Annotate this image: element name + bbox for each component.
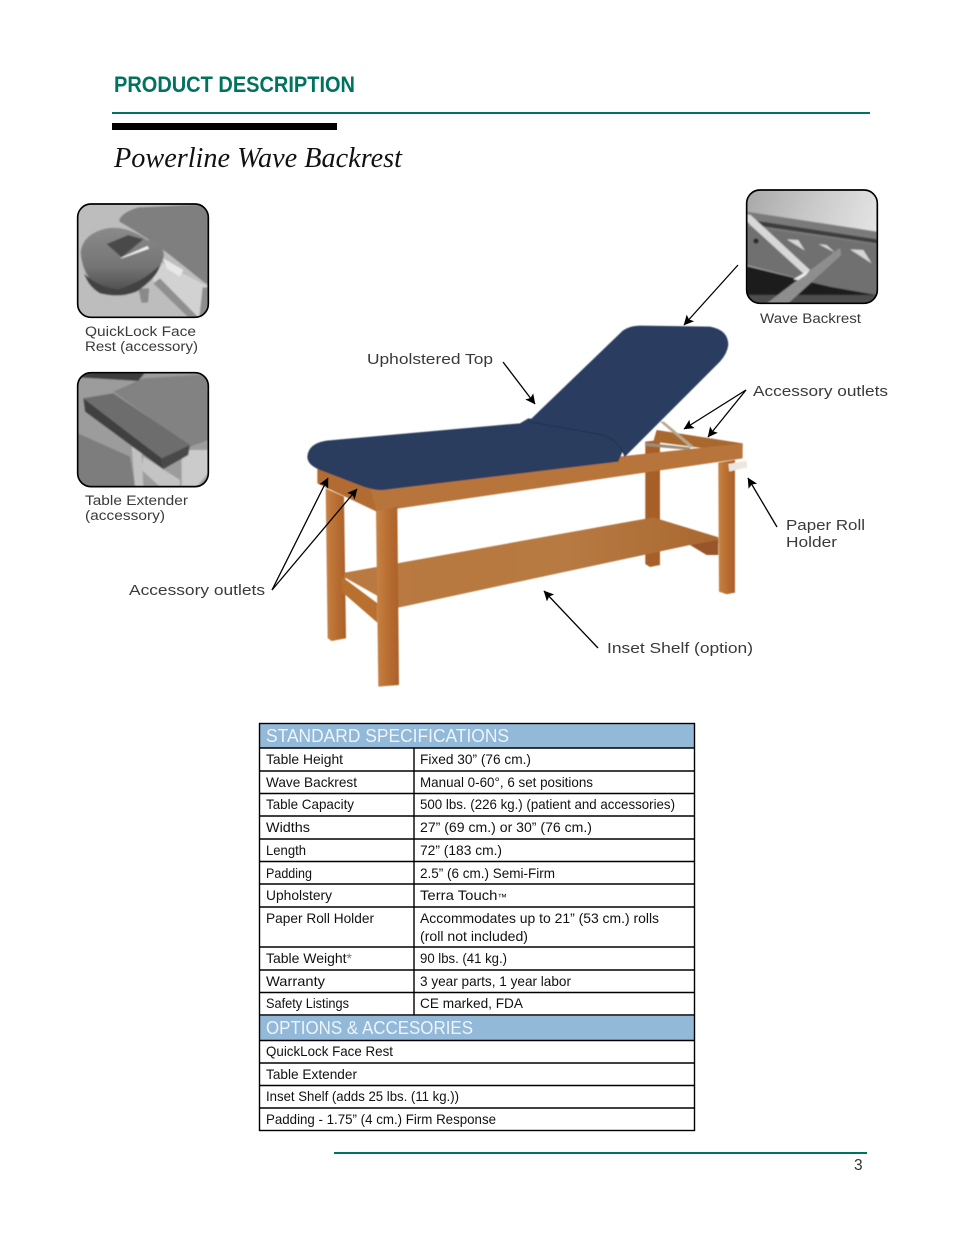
specification rows: Terra Touch ™: [420, 887, 507, 903]
specification rows: 3 year parts, 1 year labor: [420, 973, 571, 989]
option rows: Padding - 1.75” (4 cm.) Firm Response: [266, 1111, 496, 1127]
label and arrows: accessory outlets right: Accessory outlets: [753, 383, 888, 400]
specification rows: 2.5” (6 cm.) Semi-Firm: [420, 865, 555, 881]
label and arrow: upholstered top: [367, 351, 535, 404]
specification rows: Paper Roll Holder: [266, 910, 374, 926]
label and arrows: accessory outlets left: Accessory outlets: [129, 582, 265, 599]
specification rows: Warranty: [266, 973, 325, 989]
specification rows: 72” (183 cm.): [420, 842, 502, 858]
header: standard specifications: STANDARD SPECIFICATIONS: [266, 725, 509, 746]
specification rows: Fixed 30” (76 cm.): [420, 751, 531, 767]
back legs and shelf: [326, 440, 718, 641]
caption: table extender: Table Extender: [85, 493, 189, 508]
label and arrows: accessory outlets right: [684, 383, 888, 437]
label and arrow: inset shelf: [544, 591, 753, 657]
section heading: PRODUCT DESCRIPTION: [114, 72, 355, 97]
photo: table extender: [78, 373, 208, 487]
caption: QuickLock face rest: Rest (accessory): [85, 339, 198, 354]
specification rows: Length: [266, 842, 306, 858]
specification rows: 90 lbs. (41 kg.): [420, 950, 507, 966]
photo: wave backrest detail: [747, 190, 877, 303]
specification rows: Widths: [266, 819, 310, 835]
label and arrow: paper roll holder: Holder: [786, 534, 837, 551]
specification rows: CE marked, FDA: [420, 995, 524, 1011]
page number: 3: [854, 1157, 863, 1174]
caption: table extender: [85, 493, 189, 523]
header: options and accessories: OPTIONS & ACCESORIES: [266, 1017, 473, 1038]
caption: table extender: (accessory): [85, 508, 165, 523]
caption: QuickLock face rest: QuickLock Face: [85, 324, 196, 339]
option rows: [266, 1043, 496, 1127]
label and arrows: accessory outlets left: [129, 478, 357, 599]
specification rows: Table Weight*: [266, 950, 353, 966]
specification rows: Table Capacity: [266, 796, 354, 812]
seat cushion: [307, 418, 623, 490]
specification rows: 500 lbs. (226 kg.) (patient and accessories): [420, 796, 675, 812]
label and arrow: paper roll holder: [748, 478, 865, 551]
specification rows: [266, 751, 675, 1011]
label and arrow: upholstered top: Upholstered Top: [367, 351, 493, 368]
seam between seat and backrest: [528, 422, 625, 457]
specification rows: Padding: [266, 865, 312, 881]
specification rows: Table Height: [266, 751, 343, 767]
arrow: wave backrest: [684, 265, 738, 325]
label and arrow: paper roll holder: Paper Roll: [786, 517, 865, 534]
specification rows: Upholstery: [266, 887, 332, 903]
specification rows: Safety Listings: [266, 995, 349, 1011]
illustration: massage table: [307, 326, 747, 687]
caption: wave backrest: Wave Backrest: [760, 311, 861, 326]
label and arrow: inset shelf: Inset Shelf (option): [607, 640, 753, 657]
raised backrest: [528, 326, 728, 457]
specification rows: Accommodates up to 21” (53 cm.) rolls: [420, 910, 659, 926]
specification rows: Manual 0-60°, 6 set positions: [420, 774, 593, 790]
footer rule: [334, 1152, 867, 1154]
specification rows: 27” (69 cm.) or 30” (76 cm.): [420, 819, 592, 835]
specification rows: (roll not included): [420, 928, 528, 944]
option rows: QuickLock Face Rest: [266, 1043, 393, 1059]
header: standard specifications: [260, 724, 694, 748]
title: Powerline Wave Backrest: [113, 142, 403, 174]
header: options and accessories: [260, 1016, 694, 1040]
photo: QuickLock face rest: [78, 204, 208, 317]
option rows: Table Extender: [266, 1066, 357, 1082]
specification rows: Wave Backrest: [266, 774, 357, 790]
wood frame: [317, 422, 747, 687]
option rows: Inset Shelf (adds 25 lbs. (11 kg.)): [266, 1088, 459, 1104]
caption: QuickLock face rest: [85, 324, 198, 354]
specifications table: [260, 724, 694, 1130]
